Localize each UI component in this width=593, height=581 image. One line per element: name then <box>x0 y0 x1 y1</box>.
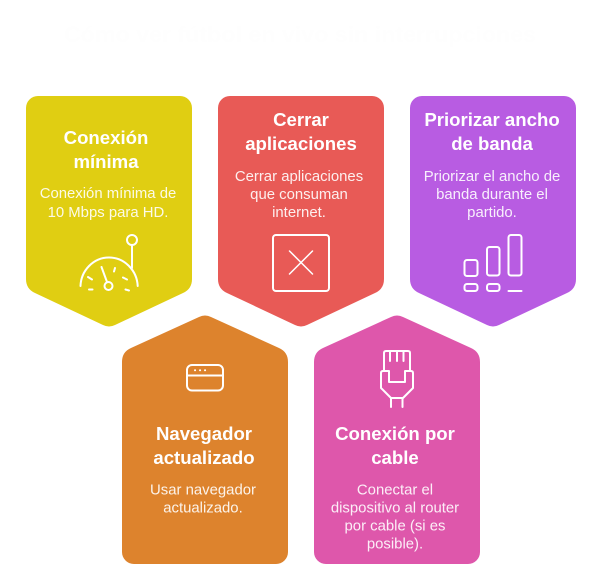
heading: cerrar aplicaciones: Cerrar <box>273 109 329 130</box>
icon: close box <box>273 235 329 291</box>
text: priorizar ancho de banda: Priorizar el ancho de <box>424 169 560 185</box>
heading: cerrar aplicaciones: aplicaciones <box>245 133 357 154</box>
panel: conexión mínima <box>26 96 192 326</box>
panel: navegador actualizado <box>122 316 288 564</box>
panel: conexión por cable <box>314 316 480 564</box>
text: navegador actualizado: Usar navegador <box>150 482 256 498</box>
heading: priorizar ancho de banda: de banda <box>451 133 533 154</box>
icon: signal bars <box>464 235 522 291</box>
icon: speedometer <box>80 235 138 290</box>
heading: conexión mínima: Conexión <box>64 127 148 148</box>
text: cerrar aplicaciones: que consuman <box>250 187 348 203</box>
heading: priorizar ancho de banda: Priorizar ancho <box>424 109 560 130</box>
heading: navegador actualizado: Navegador <box>156 423 252 444</box>
heading: conexión por cable: cable <box>371 447 419 468</box>
text: cerrar aplicaciones: Cerrar aplicaciones <box>235 169 363 185</box>
text: conexión mínima: 10 Mbps para HD. <box>48 205 168 221</box>
text: conexión por cable: por cable (si es <box>345 518 445 534</box>
text: conexión por cable: posible). <box>367 536 423 552</box>
text: conexión por cable: dispositivo al router <box>331 500 459 516</box>
heading: conexión mínima: mínima <box>73 151 139 172</box>
text: conexión mínima: Conexión mínima de <box>40 186 176 202</box>
text: cerrar aplicaciones: internet. <box>272 205 326 221</box>
icon: browser window <box>187 365 223 390</box>
title: Cómo ver fútbol en vivo sin interrupciones <box>64 22 536 47</box>
icon: ethernet plug <box>381 351 413 407</box>
text: navegador actualizado: actualizado. <box>163 500 243 516</box>
heading: navegador actualizado: actualizado <box>153 447 255 468</box>
text: priorizar ancho de banda: banda durante el <box>436 187 548 203</box>
panel: cerrar aplicaciones <box>218 96 384 326</box>
heading: conexión por cable: Conexión por <box>335 423 455 444</box>
text: priorizar ancho de banda: partido. <box>467 205 517 221</box>
text: conexión por cable: Conectar el <box>357 482 433 498</box>
panel: priorizar ancho de banda <box>410 96 576 326</box>
